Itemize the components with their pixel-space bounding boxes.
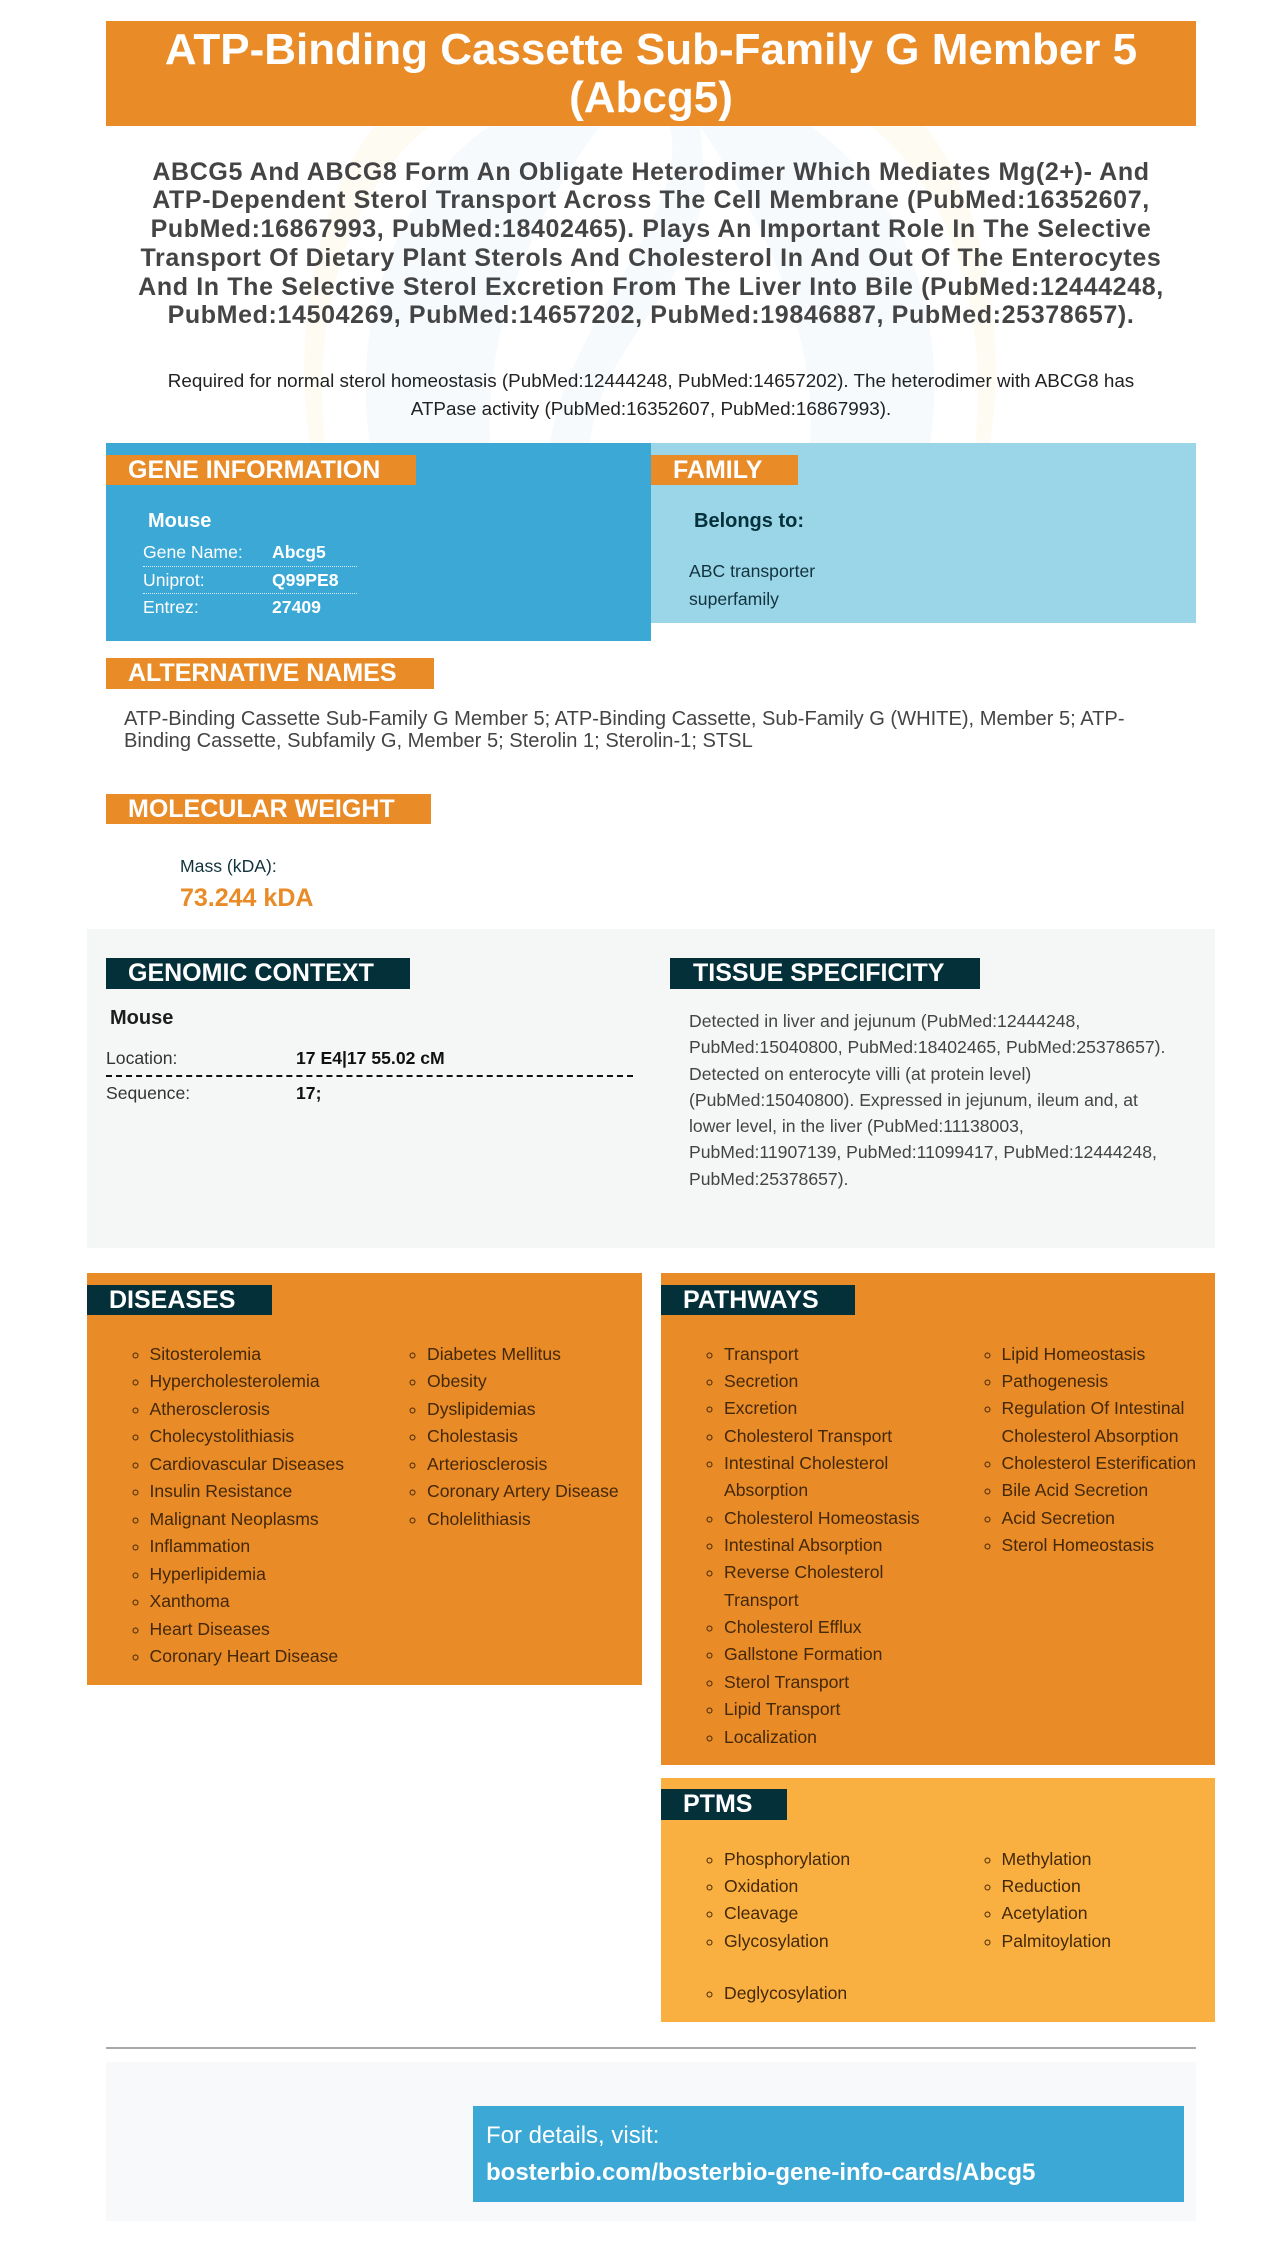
pathways list column 1: Sterol Transport	[724, 1672, 849, 1692]
diseases list column 2	[410, 1344, 619, 1528]
background watermark logo	[304, 126, 996, 443]
function details paragraph: ATPase activity (PubMed:16352607, PubMed:16867993).	[411, 398, 891, 419]
diseases list column 1: Hypercholesterolemia	[150, 1371, 320, 1391]
belongs to label: Belongs to:	[694, 510, 804, 532]
PTMs list column 1: Oxidation	[724, 1876, 798, 1896]
pathways list column 1: Cholesterol Homeostasis	[724, 1508, 920, 1528]
diseases list column 1: Xanthoma	[150, 1591, 230, 1611]
diseases list column 2: Dyslipidemias	[427, 1398, 536, 1418]
diseases list column 1	[132, 1344, 344, 1666]
tissue specificity text: lower level, in the liver (PubMed:11138003,	[689, 1116, 1024, 1136]
function summary heading: PubMed:14504269, PubMed:14657202, PubMed:19846887, PubMed:25378657).	[168, 301, 1134, 329]
species label: Mouse	[110, 1007, 173, 1029]
alternative names text	[124, 708, 1125, 752]
diseases list column 2: Cholelithiasis	[427, 1508, 531, 1528]
sequence row: Sequence:	[106, 1083, 190, 1103]
panel: pathways	[661, 1273, 1215, 1765]
diseases list column 1: Insulin Resistance	[150, 1481, 292, 1501]
panel: diseases	[87, 1273, 642, 1685]
gene facts table: Abcg5	[272, 542, 326, 562]
gene facts table: Entrez:	[143, 597, 199, 617]
tissue specificity text: PubMed:25378657).	[689, 1168, 848, 1188]
function summary heading: PubMed:16867993, PubMed:18402465). Plays An Important Role In The Selective	[151, 215, 1151, 243]
diseases list column 1: Atherosclerosis	[150, 1398, 270, 1418]
function summary heading: Transport Of Dietary Plant Sterols And Cholesterol In And Out Of The Enterocytes	[141, 244, 1161, 272]
heading: gene information: GENE INFORMATION	[128, 456, 380, 484]
call to action label: For details, visit:	[486, 2122, 659, 2149]
family name: ABC transporter	[689, 561, 815, 581]
tissue specificity text: (PubMed:15040800). Expressed in jejunum, ileum and, at	[689, 1090, 1138, 1110]
gene facts table: Uniprot:	[143, 570, 205, 590]
PTMs list column 1: Phosphorylation	[724, 1848, 850, 1868]
heading: genomic context: GENOMIC CONTEXT	[128, 959, 374, 987]
diseases list column 1: Malignant Neoplasms	[150, 1508, 319, 1528]
panel: genomic context and tissue specificity	[87, 929, 1215, 1248]
dashed divider	[106, 1075, 633, 1077]
pathways list column 1: Reverse Cholesterol	[724, 1562, 883, 1582]
alternative names text: ATP-Binding Cassette Sub-Family G Member 5; ATP-Binding Cassette, Sub-Family G (WHITE), Member 5; ATP-	[124, 708, 1125, 730]
diseases list column 2: Arteriosclerosis	[427, 1454, 547, 1474]
heading: tissue specificity: TISSUE SPECIFICITY	[693, 959, 944, 987]
sequence row	[106, 1083, 321, 1103]
pathways list column 1: Absorption	[724, 1480, 808, 1500]
pathways list column 1: Excretion	[724, 1398, 797, 1418]
pathways list column 1	[706, 1344, 920, 1747]
pathways list column 2: Cholesterol Esterification	[1002, 1453, 1196, 1473]
alternative names text: Binding Cassette, Subfamily G, Member 5; Sterolin 1; Sterolin-1; STSL	[124, 730, 753, 752]
PTMs list column 1: Glycosylation	[724, 1931, 829, 1951]
pathways list column 2: Cholesterol Absorption	[1002, 1426, 1179, 1446]
pathways list column 1: Transport	[724, 1590, 799, 1610]
heading: diseases: DISEASES	[109, 1286, 235, 1314]
footer panel	[106, 2062, 1196, 2221]
PTMs list column 2: Acetylation	[1002, 1903, 1088, 1923]
title banner	[106, 21, 1196, 126]
family name: superfamily	[689, 589, 779, 609]
heading: PTMs: PTMS	[683, 1790, 752, 1818]
title banner: ATP-Binding Cassette Sub-Family G Member 5	[165, 25, 1137, 74]
location row: 17 E4|17 55.02 cM	[296, 1048, 445, 1068]
pathways list column 2: Sterol Homeostasis	[1002, 1535, 1154, 1555]
function details paragraph: Required for normal sterol homeostasis (PubMed:12444248, PubMed:14657202). The heterodimer with ABCG8 has	[168, 370, 1134, 391]
tissue specificity text: PubMed:11907139, PubMed:11099417, PubMed:12444248,	[689, 1142, 1157, 1162]
PTMs list column 1: Cleavage	[724, 1903, 798, 1923]
diseases list column 1: Heart Diseases	[150, 1618, 270, 1638]
pathways list column 1: Lipid Transport	[724, 1699, 840, 1719]
panel: gene information	[106, 443, 651, 641]
function details paragraph	[168, 370, 1134, 419]
call to action box	[473, 2106, 1184, 2202]
footer divider	[106, 2047, 1196, 2049]
heading: diseases	[87, 1285, 272, 1315]
function summary heading: And In The Selective Sterol Excretion From The Liver Into Bile (PubMed:12444248,	[138, 273, 1164, 301]
PTMs list column 2: Reduction	[1002, 1876, 1081, 1896]
heading: family: FAMILY	[673, 456, 762, 484]
heading: pathways: PATHWAYS	[683, 1286, 819, 1314]
heading: PTMs	[661, 1789, 787, 1820]
title banner: (Abcg5)	[569, 73, 733, 122]
pathways list column 2	[984, 1344, 1196, 1555]
species label: Mouse	[148, 510, 211, 532]
pathways list column 1: Secretion	[724, 1371, 798, 1391]
diseases list column 1: Cardiovascular Diseases	[150, 1454, 344, 1474]
panel: family	[651, 443, 1196, 623]
tissue specificity text: Detected in liver and jejunum (PubMed:12444248,	[689, 1011, 1080, 1031]
diseases list column 1: Cholecystolithiasis	[150, 1426, 294, 1446]
pathways list column 1: Cholesterol Efflux	[724, 1617, 862, 1637]
tissue specificity text	[689, 1011, 1165, 1188]
gene facts table	[143, 542, 357, 617]
gene facts table: Gene Name:	[143, 542, 243, 562]
heading: family	[651, 455, 798, 485]
PTMs list column 2: Methylation	[1002, 1848, 1091, 1868]
PTMs list column 1: Deglycosylation	[724, 1983, 847, 2003]
pathways list column 2: Regulation Of Intestinal	[1002, 1398, 1184, 1418]
PTMs list column 2: Palmitoylation	[1002, 1931, 1111, 1951]
call to action url: bosterbio.com/bosterbio-gene-info-cards/Abcg5	[486, 2159, 1035, 2186]
gene facts table: 27409	[272, 597, 321, 617]
diseases list column 2: Diabetes Mellitus	[427, 1344, 561, 1364]
pathways list column 2: Lipid Homeostasis	[1002, 1344, 1145, 1364]
function summary heading: ABCG5 And ABCG8 Form An Obligate Heterodimer Which Mediates Mg(2+)- And	[152, 158, 1150, 186]
diseases list column 2: Coronary Artery Disease	[427, 1481, 619, 1501]
mass label: Mass (kDA):	[180, 856, 277, 876]
gene facts table: Q99PE8	[272, 570, 339, 590]
pathways list column 2: Bile Acid Secretion	[1002, 1480, 1148, 1500]
diseases list column 1: Coronary Heart Disease	[150, 1646, 338, 1666]
location row	[106, 1048, 445, 1068]
pathways list column 2: Pathogenesis	[1002, 1371, 1108, 1391]
pathways list column 1: Gallstone Formation	[724, 1644, 882, 1664]
diseases list column 2: Obesity	[427, 1371, 487, 1391]
diseases list column 2: Cholestasis	[427, 1426, 518, 1446]
location row: Location:	[106, 1048, 177, 1068]
pathways list column 1: Intestinal Absorption	[724, 1535, 882, 1555]
panel: PTMs	[661, 1778, 1215, 2022]
PTMs list column 2	[984, 1848, 1111, 1951]
tissue specificity text: PubMed:15040800, PubMed:18402465, PubMed:25378657).	[689, 1037, 1165, 1057]
sequence row: 17;	[296, 1083, 321, 1103]
tissue specificity text: Detected on enterocyte villi (at protein level)	[689, 1064, 1031, 1084]
pathways list column 1: Localization	[724, 1727, 817, 1747]
function summary heading: ATP-Dependent Sterol Transport Across The Cell Membrane (PubMed:16352607,	[152, 186, 1150, 214]
PTMs list column 1	[706, 1848, 850, 2003]
heading: molecular weight: MOLECULAR WEIGHT	[128, 795, 395, 823]
pathways list column 1: Cholesterol Transport	[724, 1426, 892, 1446]
diseases list column 1: Inflammation	[150, 1536, 250, 1556]
function summary heading	[138, 158, 1164, 329]
pathways list column 1: Transport	[724, 1344, 799, 1364]
heading: pathways	[661, 1285, 855, 1315]
pathways list column 1: Intestinal Cholesterol	[724, 1453, 888, 1473]
family name	[689, 561, 815, 609]
mass value: 73.244 kDA	[180, 884, 313, 912]
diseases list column 1: Hyperlipidemia	[150, 1564, 266, 1584]
pathways list column 2: Acid Secretion	[1002, 1508, 1115, 1528]
diseases list column 1: Sitosterolemia	[150, 1344, 261, 1364]
heading: alternative names: ALTERNATIVE NAMES	[128, 659, 397, 687]
